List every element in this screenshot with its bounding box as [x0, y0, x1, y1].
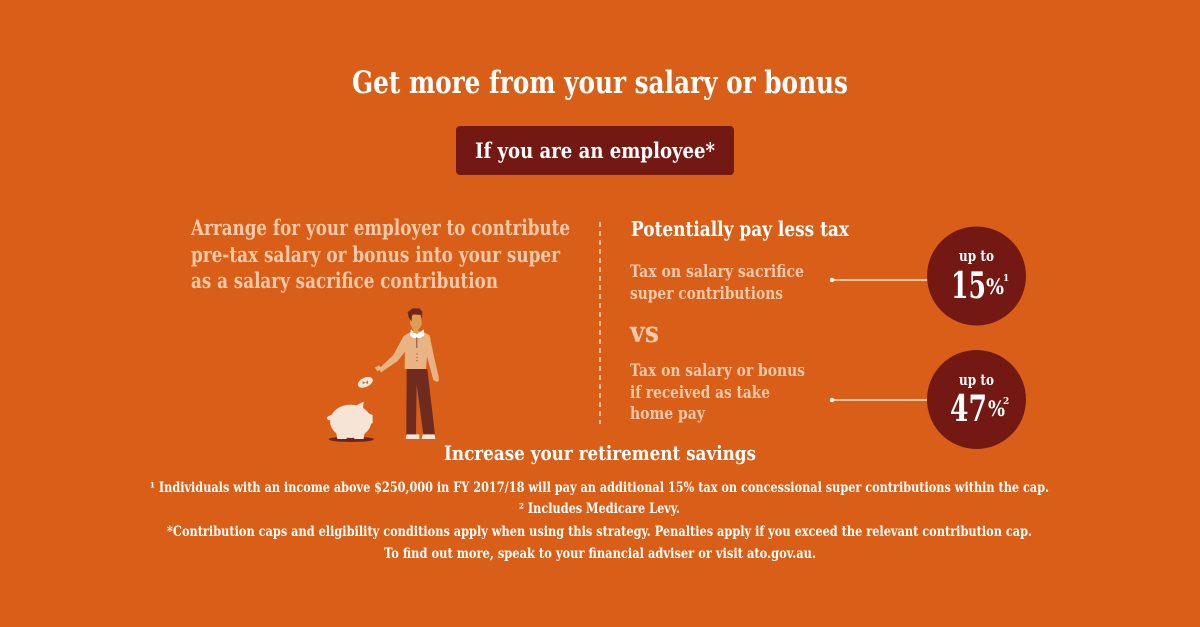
- icon: piggy bank: [327, 402, 373, 439]
- badge: if you are an employee: [456, 126, 734, 175]
- icon: coin: [356, 375, 375, 390]
- text block: tax on salary sacrifice: Tax on salary sacrifice: [630, 262, 804, 281]
- vs label: vs: [629, 315, 659, 349]
- badge: up to 47 percent: %: [988, 396, 1005, 421]
- text block: salary sacrifice explanation: pre-tax salary or bonus into your super: [191, 243, 561, 268]
- icon: man: [375, 308, 439, 439]
- badge: up to 15 percent: 15: [951, 265, 986, 307]
- icon: piggy bank shadow: [329, 437, 374, 442]
- footnotes: ² Includes Medicare Levy.: [519, 501, 680, 517]
- badge: up to 47 percent: 47: [950, 388, 987, 430]
- footnotes: [150, 480, 1049, 562]
- heading: increase your retirement savings: Increase your retirement savings: [444, 442, 756, 465]
- badge: up to 15 percent: %: [986, 274, 1004, 299]
- badge: if you are an employee: If you are an employee*: [475, 139, 715, 164]
- connector: 47 percent: [830, 398, 928, 402]
- badge: up to 47 percent: up to: [959, 372, 994, 389]
- text block: tax on salary sacrifice: [630, 262, 804, 303]
- text block: tax on salary or bonus: [630, 361, 805, 423]
- title: Get more from your salary or bonus: [352, 65, 848, 101]
- text block: salary sacrifice explanation: as a salary sacrifice contribution: [191, 269, 498, 294]
- badge: up to 15 percent: 1: [1003, 274, 1009, 284]
- text block: tax on salary or bonus: home pay: [630, 404, 705, 423]
- footnotes: To find out more, speak to your financial adviser or visit ato.gov.au.: [384, 546, 816, 562]
- heading: potentially pay less tax: Potentially pay less tax: [631, 217, 850, 241]
- text block: tax on salary or bonus: if received as take: [630, 383, 770, 402]
- badge: up to 15 percent: [927, 226, 1026, 326]
- footnotes: ¹ Individuals with an income above $250,000 in FY 2017/18 will pay an additional 15% tax on concessional super contributions within the cap.: [150, 480, 1049, 496]
- badge: up to 47 percent: 2: [1003, 397, 1009, 407]
- text block: tax on salary or bonus: Tax on salary or bonus: [630, 361, 805, 380]
- connector: 15 percent: [830, 278, 928, 282]
- text block: tax on salary sacrifice: super contributions: [630, 284, 783, 303]
- footnotes: *Contribution caps and eligibility conditions apply when using this strategy. Penalties apply if you exceed the relevant contribution cap.: [167, 524, 1032, 540]
- badge: up to 47 percent: [927, 350, 1026, 449]
- text block: salary sacrifice explanation: [190, 216, 570, 294]
- illustration: man dropping coin into piggy bank: [327, 308, 439, 442]
- text block: salary sacrifice explanation: Arrange for your employer to contribute: [190, 216, 570, 241]
- badge: up to 15 percent: up to: [959, 248, 994, 265]
